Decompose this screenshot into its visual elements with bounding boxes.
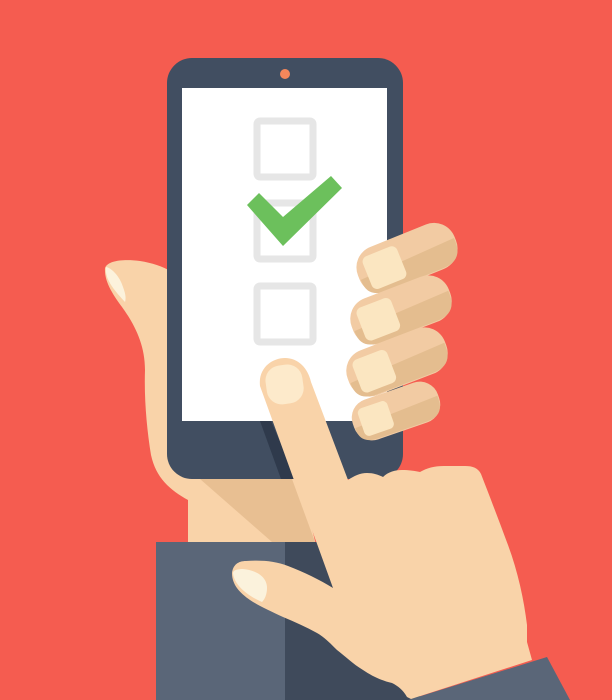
green check mark [247, 176, 342, 246]
pointing hand [232, 358, 532, 699]
smartphone [167, 58, 403, 542]
sleeve light panel [156, 542, 285, 700]
checkbox 1 [257, 121, 313, 177]
palm shadow below phone [200, 479, 315, 542]
right cuff [408, 657, 570, 700]
finger shadow on phone [260, 421, 296, 479]
checkbox 3 [257, 286, 313, 342]
finger 1 [350, 216, 464, 300]
sleeve dark panel [285, 542, 420, 700]
checklist [247, 121, 342, 342]
thumb nail [106, 267, 126, 302]
finger 2 [344, 269, 458, 351]
left sleeve [156, 542, 420, 700]
screen [182, 88, 387, 421]
holding hand: thumb and wrist [105, 260, 316, 545]
phone body [167, 58, 403, 479]
finger 4 [347, 376, 445, 446]
holding hand silhouette [105, 260, 316, 545]
thumb nail [233, 569, 267, 602]
index finger nail [264, 363, 306, 406]
finger 3 [340, 321, 454, 403]
camera [280, 69, 290, 79]
pointing hand silhouette [232, 358, 532, 699]
fingers holding phone [340, 216, 464, 446]
checkbox 2 [257, 203, 313, 259]
